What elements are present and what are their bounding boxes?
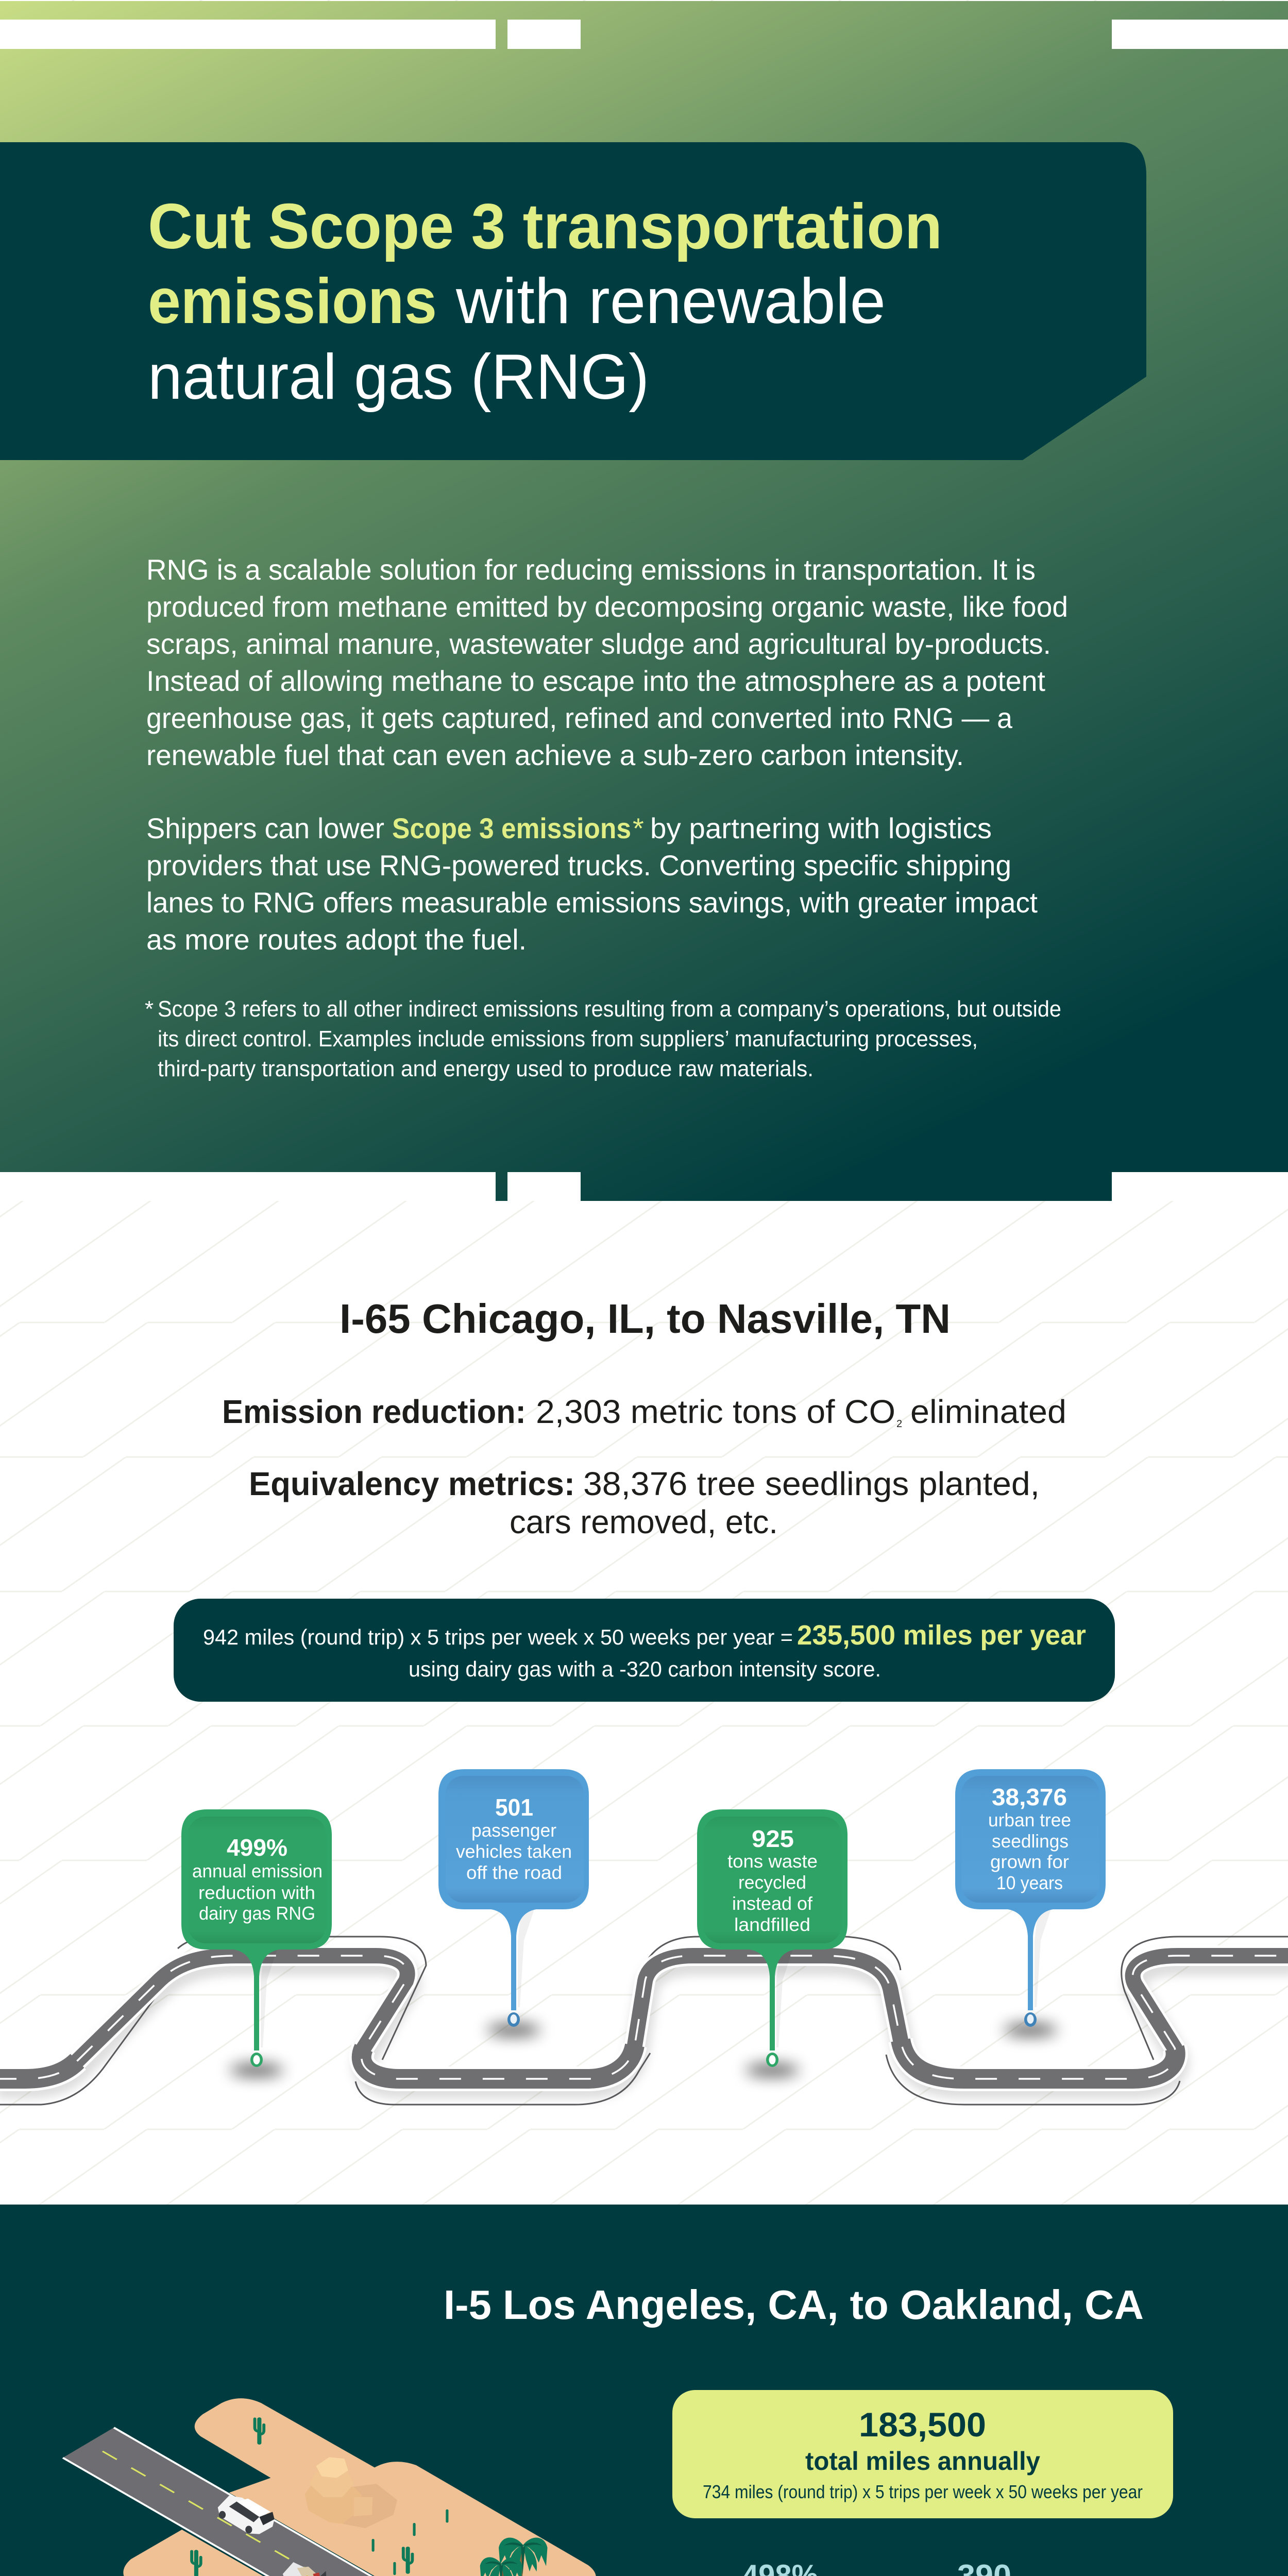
equivalency metrics statement: 38,376 tree seedlings planted,	[583, 1465, 1040, 1502]
title: emissions	[148, 266, 437, 337]
title: Cut Scope 3 transportation	[148, 191, 942, 262]
title panel	[0, 142, 1146, 460]
callout: miles per year: 942 miles (round trip) x 5 trips per week x 50 weeks per year =	[203, 1625, 793, 1649]
palm trees	[362, 2537, 567, 2576]
intro paragraph: what RNG is: scraps, animal manure, wastewater sludge and agricultural by-products.	[146, 628, 1051, 660]
pin: 925 tons waste: 925	[752, 1825, 794, 1852]
intro paragraph: what RNG is: renewable fuel that can even achieve a sub-zero carbon intensity.	[146, 739, 964, 771]
pin: 499% emission reduction: dairy gas RNG	[199, 1903, 315, 1924]
pin: 38,376 urban tree seedlings: seedlings	[992, 1831, 1069, 1852]
pin: 925 tons waste: instead of	[732, 1893, 813, 1914]
intro paragraph: shippers and Scope 3: by partnering with logistics	[650, 812, 992, 844]
pin: 501 passenger vehicles: 501	[495, 1794, 533, 1821]
footnote: its direct control. Examples include emissions from suppliers’ manufacturing processes,	[158, 1026, 978, 1052]
callout: miles per year: 235,500 miles per year	[797, 1620, 1086, 1651]
pin: 499% emission reduction: annual emission	[192, 1860, 323, 1882]
pin: 38,376 urban tree seedlings	[955, 1769, 1106, 2036]
card: 183,500 total miles annually: total miles annually	[805, 2447, 1040, 2476]
intro paragraph: what RNG is: Instead of allowing methane to escape into the atmosphere as a potent	[146, 665, 1045, 697]
pin: 38,376 urban tree seedlings: 10 years	[996, 1872, 1063, 1893]
hero panel: gradient background	[0, 1, 1288, 1201]
title	[148, 191, 942, 413]
equivalency metrics statement	[249, 1465, 1040, 1540]
illustration: isometric desert highway	[63, 2398, 644, 2576]
title: natural gas (RNG)	[148, 342, 649, 413]
intro paragraph: shippers and Scope 3: Shippers can lower	[146, 812, 384, 844]
pin: 925 tons waste: landfilled	[734, 1914, 810, 1935]
pin: 499% emission reduction: reduction with	[198, 1882, 315, 1903]
callout: miles per year	[174, 1599, 1115, 1702]
pin: 499% emission reduction	[181, 1809, 332, 2076]
card: 183,500 total miles annually: 183,500	[859, 2405, 986, 2444]
intro paragraph: what RNG is	[146, 553, 1068, 771]
pin: 501 passenger vehicles	[438, 1769, 589, 2036]
intro paragraph: shippers and Scope 3	[146, 812, 1038, 956]
pin: 925 tons waste: recycled	[738, 1872, 806, 1893]
intro paragraph: shippers and Scope 3: lanes to RNG offers measurable emissions savings, with greater impact	[146, 886, 1038, 919]
pin: 38,376 urban tree seedlings: grown for	[990, 1851, 1069, 1872]
intro paragraph: shippers and Scope 3: as more routes adopt the fuel.	[146, 923, 527, 956]
intro paragraph: shippers and Scope 3: providers that use RNG-powered trucks. Converting specific shipping	[146, 849, 1011, 882]
callout: miles per year: using dairy gas with a -320 carbon intensity score.	[409, 1657, 881, 1681]
vehicle: white SUV	[218, 2496, 275, 2534]
emission reduction statement	[222, 1393, 1066, 1430]
panel: I-5 section background	[0, 2205, 1288, 2576]
footnote: Scope 3 refers to all other indirect emissions resulting from a company’s operations, but outside	[158, 996, 1061, 1022]
winding road chart	[0, 1937, 1288, 2105]
vehicle: white convertible	[283, 2562, 341, 2576]
pin: 501 passenger vehicles: off the road	[466, 1862, 562, 1883]
pin: 501 passenger vehicles: passenger	[471, 1820, 556, 1841]
intro paragraph: what RNG is: greenhouse gas, it gets captured, refined and converted into RNG — a	[146, 702, 1013, 734]
footnote	[145, 996, 1061, 1081]
emission reduction statement: eliminated	[910, 1393, 1066, 1430]
footnote: third-party transportation and energy used to produce raw materials.	[158, 1056, 814, 1081]
card: 183,500 total miles annually	[672, 2390, 1173, 2518]
pin: 499% emission reduction: 499%	[227, 1834, 287, 1861]
intro paragraph: what RNG is: produced from methane emitted by decomposing organic waste, like food	[146, 590, 1068, 623]
equivalency metrics statement: Equivalency metrics:	[249, 1465, 575, 1502]
pin: 38,376 urban tree seedlings: urban tree	[988, 1809, 1071, 1831]
emission reduction statement: 2	[896, 1418, 902, 1430]
intro paragraph: what RNG is: RNG is a scalable solution for reducing emissions in transportation. It is	[146, 553, 1036, 586]
emission reduction statement: 2,303 metric tons of CO	[536, 1393, 895, 1430]
intro paragraph: shippers and Scope 3: *	[633, 812, 644, 844]
pin: 925 tons waste	[697, 1809, 848, 2076]
pin: 501 passenger vehicles: vehicles taken	[456, 1841, 572, 1862]
intro paragraph: shippers and Scope 3: Scope 3 emissions	[392, 812, 631, 844]
pin: 38,376 urban tree seedlings: 38,376	[992, 1784, 1067, 1810]
heading: I-65 route: I-65 Chicago, IL, to Nasville, TN	[340, 1296, 951, 1342]
footnote: *	[145, 996, 154, 1022]
equivalency metrics statement: cars removed, etc.	[510, 1503, 778, 1540]
title: with renewable	[455, 266, 886, 337]
emission reduction statement: Emission reduction:	[222, 1393, 526, 1430]
pin: 925 tons waste: tons waste	[727, 1851, 818, 1872]
card: 183,500 total miles annually: 734 miles (round trip) x 5 trips per week x 50 weeks per year	[703, 2481, 1143, 2502]
heading: I-5 route: I-5 Los Angeles, CA, to Oakland, CA	[444, 2282, 1144, 2328]
